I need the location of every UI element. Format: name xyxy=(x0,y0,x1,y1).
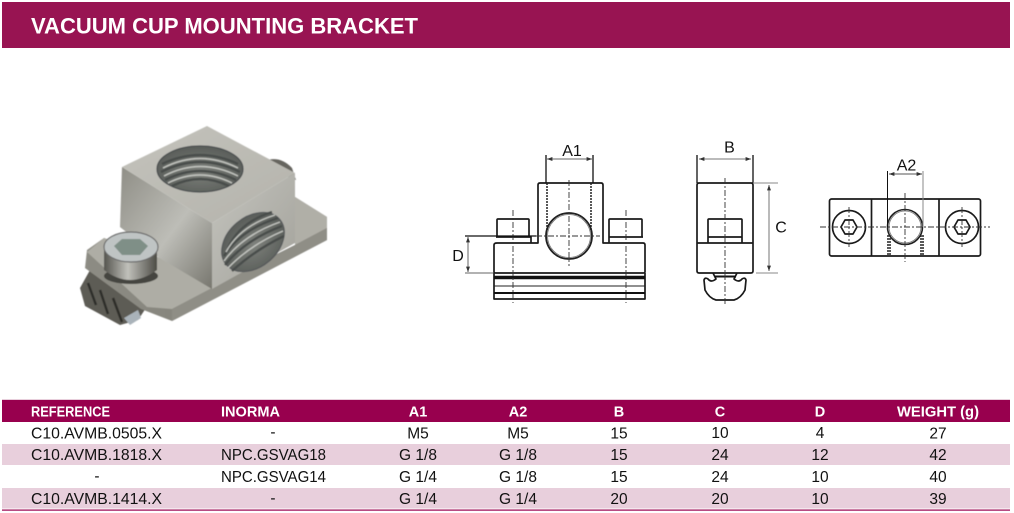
dimension B: B xyxy=(724,140,735,156)
row 4: 39 xyxy=(929,491,947,508)
row 4: G 1/4 xyxy=(399,491,437,508)
table header row: REFERENCE xyxy=(31,404,110,420)
table header row: C xyxy=(715,404,726,420)
row 1: M5 xyxy=(407,426,429,442)
row 2: G 1/8 xyxy=(499,447,537,464)
row 1: 4 xyxy=(816,425,825,442)
table header row: WEIGHT (g) xyxy=(897,404,979,420)
dimension A2: A2 xyxy=(897,158,916,174)
row 4 xyxy=(2,488,1010,511)
threaded top hole xyxy=(157,146,243,192)
row 4: 20 xyxy=(711,491,729,508)
row 2: G 1/8 xyxy=(399,447,437,464)
row 3: G 1/8 xyxy=(499,469,537,486)
row 2: 15 xyxy=(610,447,628,464)
row 3: 24 xyxy=(711,469,729,486)
specification table xyxy=(2,399,1010,511)
row 2: 24 xyxy=(711,447,729,464)
dimension A2 xyxy=(888,158,923,227)
right bolt xyxy=(609,219,643,243)
row 3: 15 xyxy=(610,469,628,486)
title banner xyxy=(2,2,1010,48)
technical drawing: top view xyxy=(820,158,990,262)
table header row: A1 xyxy=(409,404,427,420)
row 4: C10.AVMB.1414.X xyxy=(31,491,163,508)
product photo: mounting bracket xyxy=(80,126,327,325)
table header row: A2 xyxy=(509,404,527,420)
row 1: 10 xyxy=(711,425,729,442)
table header row: D xyxy=(815,404,825,420)
row 3: NPC.GSVAG14 xyxy=(221,469,326,486)
dimension A1: A1 xyxy=(562,143,582,160)
dimension B xyxy=(697,140,753,183)
row 1 xyxy=(31,424,947,442)
technical drawing: side view xyxy=(697,140,787,305)
row 2: C10.AVMB.1818.X xyxy=(31,447,163,464)
threaded side hole xyxy=(210,200,296,284)
table header row: INORMA xyxy=(221,404,281,420)
block left face xyxy=(120,167,212,289)
block top face xyxy=(122,126,295,223)
centre port xyxy=(888,210,922,244)
socket head bolt xyxy=(104,232,158,284)
t-nut profile xyxy=(704,273,746,300)
left bolt xyxy=(496,219,531,243)
base plate xyxy=(85,197,327,321)
t-nut xyxy=(80,270,146,325)
dimension C: C xyxy=(775,220,787,236)
row 3: - xyxy=(94,468,100,485)
row 2: 12 xyxy=(811,447,829,464)
row 4: G 1/4 xyxy=(499,491,537,508)
table header row: B xyxy=(614,404,624,420)
dimension D: D xyxy=(452,248,464,265)
row 4: - xyxy=(270,490,276,507)
port circle xyxy=(546,213,592,259)
row 4: 10 xyxy=(811,491,829,508)
block right face xyxy=(212,173,295,289)
row 3: G 1/4 xyxy=(399,469,437,486)
rear bolt xyxy=(264,159,296,180)
row 1: M5 xyxy=(507,426,529,442)
outline xyxy=(494,183,645,273)
row 1: - xyxy=(270,424,276,441)
row 1: 15 xyxy=(610,426,628,442)
dimension A1 xyxy=(546,143,593,183)
row 2 xyxy=(2,444,1010,465)
dimension C xyxy=(753,183,787,273)
table header row xyxy=(2,400,1010,422)
row 4: 20 xyxy=(610,491,628,508)
row 3: 40 xyxy=(929,469,947,486)
right screw xyxy=(946,210,978,244)
row 2: NPC.GSVAG18 xyxy=(221,447,326,464)
left screw xyxy=(832,210,866,244)
dimension D xyxy=(452,236,536,273)
technical drawing: front view xyxy=(452,143,645,303)
row 2: 42 xyxy=(929,447,947,464)
row 3: 10 xyxy=(811,469,829,486)
row 1: C10.AVMB.0505.X xyxy=(31,426,163,442)
row 1: 27 xyxy=(929,426,947,442)
row 3 xyxy=(94,468,947,486)
title text: VACUUM CUP MOUNTING BRACKET xyxy=(31,14,419,38)
